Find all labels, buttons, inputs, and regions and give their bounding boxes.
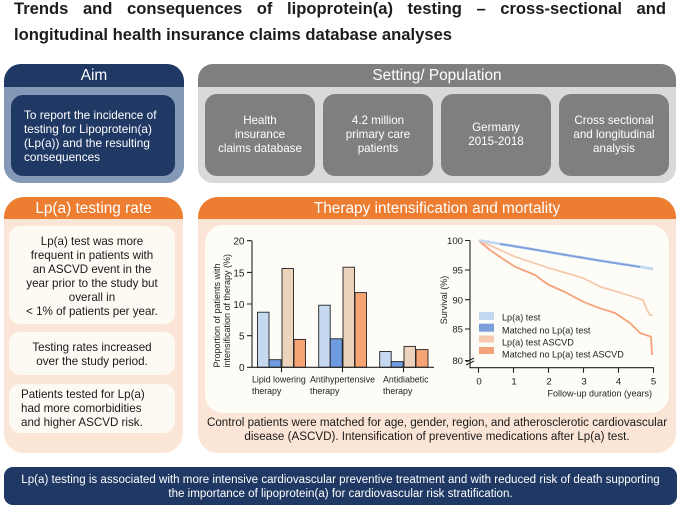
y axis label: Proportion of patients with [212,263,222,368]
text: frequency: < 1% of patients per year. [26,305,158,318]
box: patients: 4.2 million [352,114,404,127]
bars: lipid lowering [258,268,306,367]
aim text: consequences [24,150,100,164]
y tick labels: 100 [447,236,463,247]
y tick labels [233,237,245,374]
axes [247,241,434,372]
box: analysis type: Cross sectional [574,114,654,127]
text: comorbidities [9,384,175,433]
box: analysis type: and longitudinal [573,128,655,141]
conclusion banner: the importance of lipoprotein(a) for cardiovascular risk stratification. [168,488,513,500]
axes [465,240,654,373]
box: patients [323,94,433,176]
text: rates increased: over the study period. [36,355,148,368]
heading: aim [4,64,184,87]
box: analysis type [559,94,669,176]
panel: therapy and mortality [198,197,676,453]
x tick labels: 1 [511,376,517,388]
x axis label: Follow-up duration (years) [547,388,652,398]
box: patients: patients [358,142,398,155]
heading: testing rate: Lp(a) testing rate [35,200,152,217]
text: frequency: year prior to the study but [26,277,158,290]
x labels: therapy [383,386,413,396]
y tick labels: 80 [452,356,463,367]
title: longitudinal health insurance claims database analyses [14,25,452,44]
box: analysis type: analysis [593,142,635,155]
x tick labels: 2 [546,376,552,388]
panel: testing rate [4,197,183,453]
y tick labels: 85 [452,324,463,336]
x labels: therapy [310,386,340,396]
survival curves [479,240,653,355]
y tick labels: 20 [233,237,245,248]
y tick labels: 90 [452,296,463,306]
box: location and years: Germany [472,121,520,134]
y tick labels: 5 [239,332,245,342]
aim text: testing for Lipoprotein(a) [24,122,152,136]
x tick labels: 5 [651,376,656,388]
x labels: Antihypertensive [310,374,375,384]
title [14,0,666,44]
y tick labels: 15 [233,268,245,279]
caption: disease (ASCVD). Intensification of preventive medications after Lp(a) test. [244,430,630,443]
conclusion banner [4,467,677,505]
y tick labels: 95 [452,266,463,276]
x tick labels: 4 [616,376,622,388]
conclusion banner: Lp(a) testing is associated with more intensive cardiovascular preventive treatment and with reduced risk of death supporting [21,474,660,486]
text: comorbidities: had more comorbidities [21,402,142,415]
panel: setting/population [198,64,676,183]
legend [479,312,624,360]
text: frequency: frequent in patients with [31,249,153,262]
bars: antihypertensive [319,267,366,367]
y axis label [212,254,232,368]
y axis label: intensification of therapy (%) [222,254,232,368]
x tick labels [476,376,656,388]
heading: setting: Setting/ Population [372,67,502,84]
heading: therapy: Therapy intensification and mortality [314,200,560,217]
chart background [205,225,669,413]
box: database [205,94,315,176]
text: frequency: an ASCVD event in the [33,263,151,276]
y tick labels: 0 [239,363,245,374]
text: comorbidities: Patients tested for Lp(a) [21,388,145,401]
box: location and years: 2015-2018 [468,135,524,148]
text: frequency: Lp(a) test was more [41,235,143,248]
aim text: (Lp(a)) and the resulting [24,136,150,150]
legend: Matched no Lp(a) test ASCVD [502,350,624,360]
aim text [11,95,175,176]
bar chart [212,237,434,396]
bars: antidiabetic [380,346,428,367]
legend: Lp(a) test [502,313,541,323]
box: location and years [441,94,551,176]
heading: setting [198,64,676,87]
y tick labels: 10 [233,300,245,311]
heading: testing rate [4,197,183,219]
x labels: therapy [252,386,282,396]
panel: aim [4,64,184,183]
legend: Matched no Lp(a) test [502,325,591,335]
y axis label: Survival (%) [439,276,449,324]
box: database: insurance [235,128,285,141]
box: database: claims database [218,142,302,155]
heading: therapy [198,197,676,219]
x labels: Lipid lowering [252,374,306,384]
text: frequency: overall in [69,291,115,304]
legend: Lp(a) test ASCVD [502,338,574,348]
x labels [252,374,429,396]
heading: aim: Aim [81,67,107,84]
caption [207,416,667,443]
caption: Control patients were matched for age, gender, region, and atherosclerotic cardiovascular [207,416,667,429]
x labels: Antidiabetic [383,374,429,384]
x tick labels: 0 [476,376,482,388]
box: database: Health [243,114,277,127]
survival chart [439,236,656,398]
text: comorbidities: and higher ASCVD risk. [21,416,143,429]
x tick labels: 3 [581,376,587,388]
aim text: To report the incidence of [24,108,156,122]
box: patients: primary care [346,128,410,141]
text: frequency [9,226,175,324]
axis break [466,358,474,365]
text: rates increased [9,332,175,375]
y tick labels [447,236,463,367]
text: rates increased: Testing rates increased [32,341,152,354]
